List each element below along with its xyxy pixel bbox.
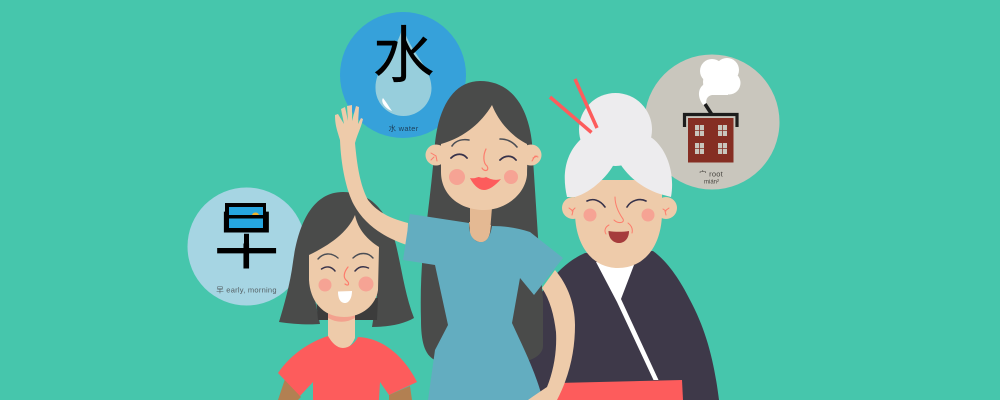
grandmother face — [575, 180, 662, 268]
girl shirt — [278, 336, 417, 400]
caption: early, morning: 早 early, morning — [216, 286, 277, 294]
grandmother red bag — [557, 380, 683, 400]
girl nose — [344, 267, 349, 285]
woman ears — [426, 144, 446, 166]
hair sticks — [550, 79, 597, 132]
caption: water: 水 water — [388, 123, 419, 133]
woman dress — [403, 214, 563, 400]
girl hair shadow — [316, 298, 378, 320]
woman raised hand and arm — [335, 105, 408, 245]
grandmother cheeks — [584, 208, 596, 222]
grandmother nose and wrinkles — [569, 197, 669, 234]
grandmother eyes — [587, 200, 646, 207]
icon: roof — [684, 114, 737, 127]
woman cheeks — [449, 169, 465, 185]
girl eyebrows and eyes — [318, 254, 373, 259]
grandmother collar and sash — [596, 262, 658, 380]
woman lips — [470, 177, 501, 190]
icon: sky windows with sun — [222, 203, 271, 244]
grandmother hair bun — [579, 93, 652, 166]
grandmother mouth — [608, 231, 629, 243]
icon: water drop — [375, 23, 432, 116]
icon: brick house — [688, 118, 734, 162]
girl neck — [328, 300, 355, 349]
character: girl — [278, 192, 417, 400]
caption: pinyin: mián² — [704, 180, 719, 186]
woman nose — [482, 149, 488, 170]
character: 水: 水 — [372, 5, 435, 95]
character: grandmother — [525, 79, 719, 400]
woman face — [441, 105, 527, 210]
grandmother ears — [562, 197, 584, 219]
girl smile — [338, 291, 352, 303]
grandmother hair — [565, 132, 672, 197]
bubble: water character — [340, 5, 466, 138]
woman long hair — [421, 81, 543, 360]
bubble: roof character — [644, 54, 780, 190]
girl arms — [278, 379, 412, 400]
woman neck — [470, 195, 493, 242]
girl hair — [279, 192, 414, 327]
girl face — [309, 215, 379, 317]
woman lower arm and hand — [528, 270, 575, 400]
grandmother jacket — [525, 251, 719, 400]
icon: chimney — [705, 104, 712, 114]
bubble: early morning character — [188, 188, 306, 306]
woman eyebrows and eyes — [452, 139, 517, 147]
character: waving woman — [335, 81, 575, 400]
caption: root: 宀 root — [699, 168, 724, 178]
girl cheeks — [318, 278, 332, 292]
character: 早: 早 — [214, 190, 278, 282]
icon: smoke — [699, 58, 740, 106]
